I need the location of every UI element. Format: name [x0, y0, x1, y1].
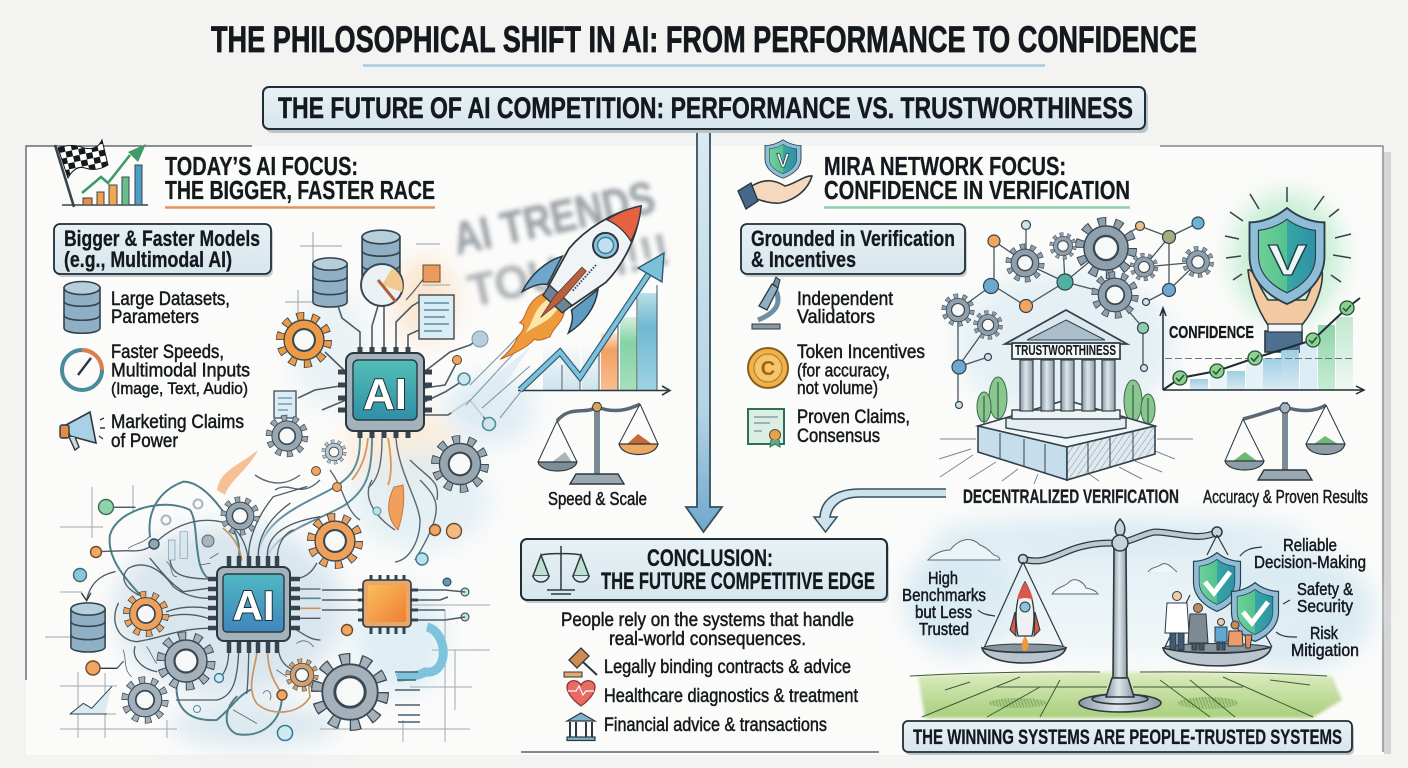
box: winning systems — [903, 721, 1354, 755]
watermark: blurred AI trends — [448, 171, 674, 317]
heading: conclusion — [601, 545, 875, 595]
people group — [1165, 592, 1227, 650]
item: large datasets — [64, 282, 230, 333]
heading: conclusion: CONCLUSION: — [647, 545, 773, 572]
shield: upper check — [1194, 553, 1240, 611]
icon: tall database — [362, 230, 400, 285]
label: high benchmarks: Benchmarks — [902, 585, 986, 605]
scale base — [1079, 678, 1161, 712]
item: independent validators: Validators — [797, 307, 875, 328]
grass hatch patches — [989, 697, 1238, 709]
illustration: verification network — [939, 217, 1212, 484]
illustration: confidence chart and shield — [1160, 187, 1364, 394]
gear: tan — [288, 661, 316, 689]
sky wash — [905, 517, 1375, 670]
building: steps — [1006, 410, 1126, 438]
gear: bottom gray — [125, 680, 165, 720]
mini line chart — [70, 687, 112, 714]
chart bars — [1190, 317, 1353, 390]
building: roof — [1005, 310, 1127, 359]
gear: network far left — [944, 296, 972, 324]
ground — [918, 672, 1342, 718]
label: risk mitigation: Risk — [1310, 623, 1338, 643]
gear: network large — [1080, 222, 1132, 274]
grid lines — [45, 485, 490, 742]
building: plinth — [978, 400, 1155, 480]
icon: document — [419, 295, 454, 339]
item: independent validators: Independent — [797, 289, 894, 310]
central arrow — [686, 128, 722, 532]
glow — [1232, 193, 1342, 323]
label: high benchmarks — [902, 568, 986, 639]
item: independent validators — [752, 277, 894, 329]
statement: People rely on the systems that handle — [561, 610, 854, 631]
left pan — [982, 648, 1066, 663]
panel: Mira network focus — [738, 140, 1130, 447]
tree: left — [977, 377, 1007, 424]
blue arc — [397, 627, 443, 678]
icon: racing flag and growth chart — [55, 140, 148, 207]
chip: upper AI — [338, 347, 432, 438]
statement: real-world consequences. — [609, 629, 806, 650]
shield: large V: V — [1268, 236, 1308, 285]
item: token incentives — [748, 342, 925, 398]
label: reliable decision-making: Reliable — [1283, 535, 1337, 555]
list marks — [395, 672, 420, 722]
item: marketing claims — [60, 412, 244, 452]
gear: centre gray — [161, 636, 211, 686]
gear: top gray — [224, 500, 256, 532]
left pan strings — [984, 562, 1064, 648]
item: faster speeds: Faster Speeds, — [111, 342, 224, 363]
gear: large — [317, 659, 383, 725]
watermark: blurred AI trends: TOUGH!!! — [463, 223, 674, 317]
curved arrow — [814, 489, 946, 532]
heading underline — [165, 206, 435, 209]
right pan strings — [1165, 535, 1272, 647]
label: safety and security — [1297, 579, 1353, 616]
box: grounded in verification — [741, 224, 967, 277]
heading: Mira network focus: MIRA NETWORK FOCUS: — [824, 151, 1066, 181]
right pan rim — [1163, 644, 1271, 652]
box: bigger and faster models — [54, 224, 273, 277]
gear: network right — [1132, 255, 1156, 279]
statement — [561, 610, 854, 650]
gear: network lower — [1095, 275, 1135, 315]
icon: small database — [313, 258, 347, 307]
label: safety and security: Security — [1297, 596, 1353, 616]
item: faster speeds: Multimodal Inputs — [111, 360, 250, 382]
label: confidence: CONFIDENCE — [1169, 322, 1254, 342]
gear: network far right — [1184, 248, 1212, 276]
speed streak — [450, 347, 530, 425]
heading: today's AI focus — [165, 151, 435, 205]
dashed target line — [1165, 358, 1353, 360]
pale wash — [956, 270, 1176, 420]
chart axes — [1160, 308, 1364, 394]
item: finance: Financial advice & transactions — [604, 715, 827, 736]
label leaders — [978, 547, 1297, 637]
icon: gauge — [361, 264, 403, 306]
item: token incentives: not volume) — [797, 378, 878, 398]
node lines — [112, 505, 135, 509]
label: high benchmarks: Trusted — [919, 619, 969, 639]
item: token incentives: C — [761, 358, 775, 380]
heading: conclusion: THE FUTURE COMPETITIVE EDGE — [601, 568, 875, 595]
network nodes — [952, 217, 1204, 408]
icon: hand holding shield: V — [777, 151, 790, 172]
item: finance — [567, 713, 827, 740]
gear: network tan centre — [1052, 234, 1074, 258]
heading: today's AI focus: THE BIGGER, FASTER RACE — [165, 175, 435, 205]
label: reliable decision-making: Decision-Making — [1254, 552, 1366, 572]
illustration: lower AI circuit — [45, 450, 490, 747]
hand holding shield — [1248, 270, 1322, 352]
illustration: rocket — [477, 183, 666, 383]
chip: lower AI: AI — [232, 582, 274, 629]
label: trustworthiness: TRUSTWORTHINESS — [1015, 343, 1116, 359]
tan wires — [223, 528, 320, 712]
label: high benchmarks: High — [928, 568, 958, 588]
label: high benchmarks: but Less — [915, 602, 972, 622]
box: bigger and faster models: Bigger & Faster Models — [64, 226, 260, 251]
circuit nodes — [74, 500, 469, 740]
item: proven claims: Proven Claims, — [797, 407, 910, 428]
item: proven claims: Consensus — [797, 426, 880, 447]
title underline — [363, 64, 1045, 67]
gear: network left — [1008, 246, 1042, 280]
scale finial and pivot — [1018, 519, 1222, 564]
gear: left orange — [126, 594, 166, 634]
item: legal — [564, 648, 851, 678]
scale beam highlight — [1023, 532, 1217, 561]
label: risk mitigation: Mitigation — [1291, 640, 1359, 660]
watermark: blurred AI trends: AI TRENDS — [448, 171, 659, 265]
scale: accuracy — [1225, 402, 1345, 480]
soft colour wash — [115, 525, 445, 747]
ground perspective lines — [910, 672, 1327, 717]
item: token incentives: (for accuracy, — [797, 360, 890, 380]
faded bars — [168, 532, 187, 560]
item: large datasets: Large Datasets, — [111, 289, 230, 310]
shield: lower check — [1232, 583, 1278, 641]
panel: main sheet — [26, 146, 1391, 755]
gear: orange — [280, 316, 328, 364]
trend line — [1163, 298, 1360, 390]
gear: network low left — [976, 312, 1000, 338]
scale: speed and scale — [538, 402, 658, 484]
scale beam — [1023, 532, 1217, 561]
item: legal: Legally binding contracts & advice — [604, 657, 851, 678]
icon: small document — [274, 391, 296, 418]
gear: small pale — [324, 442, 344, 462]
illustration: big scale scene — [902, 517, 1375, 755]
chart: rising bars and arrow — [518, 253, 670, 395]
box: grounded in verification: Grounded in Verification — [751, 226, 955, 251]
wires between chips — [258, 438, 372, 555]
scribble marks — [123, 537, 313, 723]
chip: lower AI — [208, 556, 300, 653]
item: marketing claims: of Power — [111, 431, 179, 452]
tangled wires in traced coordinates — [70, 482, 320, 735]
icon: hand holding shield — [738, 140, 812, 209]
icon: balance scale — [533, 546, 589, 594]
soft colour washes — [290, 258, 535, 550]
illustration: upper AI circuit — [255, 230, 535, 562]
thick teal loops — [110, 482, 282, 735]
label: safety and security: Safety & — [1297, 579, 1353, 599]
ground rays — [939, 439, 1193, 484]
panel: today's AI focus — [54, 140, 435, 452]
chip wires — [322, 590, 465, 620]
item: faster speeds — [62, 342, 250, 398]
chip: upper AI: AI — [363, 370, 407, 419]
gear: orange blob — [311, 517, 359, 565]
teal chip wires — [293, 596, 320, 601]
heading underline — [824, 206, 1130, 209]
shield rays — [1225, 187, 1351, 282]
trend checkpoints — [1173, 301, 1354, 385]
item: healthcare — [567, 681, 859, 707]
label: speed and scale: Speed & Scale — [548, 488, 647, 509]
right pan — [1163, 647, 1271, 666]
label: reliable decision-making — [1254, 535, 1366, 572]
dark signal wires — [87, 487, 320, 700]
left pan rim — [983, 644, 1066, 652]
scale post — [1113, 548, 1127, 678]
label: decentralized verification: DECENTRALIZED VERIFICATION — [963, 486, 1179, 508]
box: conclusion — [521, 539, 889, 603]
tree: right — [1124, 380, 1155, 426]
network links — [958, 223, 1198, 405]
rocket: small — [1010, 582, 1040, 651]
item: marketing claims: Marketing Claims — [111, 412, 244, 433]
wires to chip — [298, 300, 489, 424]
database icon — [71, 603, 105, 652]
box: bigger and faster models: (e.g., Multimodal AI) — [64, 247, 232, 272]
item: large datasets: Parameters — [111, 307, 199, 328]
shield: large V — [1250, 208, 1324, 304]
speed lines — [466, 318, 540, 418]
item: proven claims — [748, 407, 910, 447]
icon: orange tile — [423, 265, 440, 282]
gear: right gray — [436, 440, 484, 488]
item: token incentives: Token Incentives — [797, 342, 925, 363]
box: grounded in verification: & Incentives — [751, 247, 856, 272]
banner: future of AI competition — [263, 87, 1148, 133]
arrow head — [82, 593, 91, 601]
item: healthcare: Healthcare diagnostics & treatment — [604, 686, 859, 707]
orange flame marks — [217, 450, 258, 495]
label: risk mitigation — [1291, 623, 1359, 660]
heading: Mira network focus — [824, 151, 1130, 205]
heading: today's AI focus: TODAY’S AI FOCUS: — [165, 151, 358, 181]
crosshair grid marks — [285, 232, 450, 320]
gear: left gray — [269, 418, 305, 454]
heading: Mira network focus: CONFIDENCE IN VERIFICATION — [824, 175, 1130, 205]
item: faster speeds: (Image, Text, Audio) — [111, 379, 248, 398]
panel: conclusion — [521, 539, 889, 740]
building: columns — [1020, 360, 1115, 411]
clouds — [928, 540, 1177, 594]
people: girl and small child — [1228, 621, 1252, 648]
chip: orange — [358, 575, 418, 634]
banner: future of AI competition: THE FUTURE OF AI COMPETITION: PERFORMANCE VS. TRUSTWORTHINESS — [278, 92, 1133, 125]
